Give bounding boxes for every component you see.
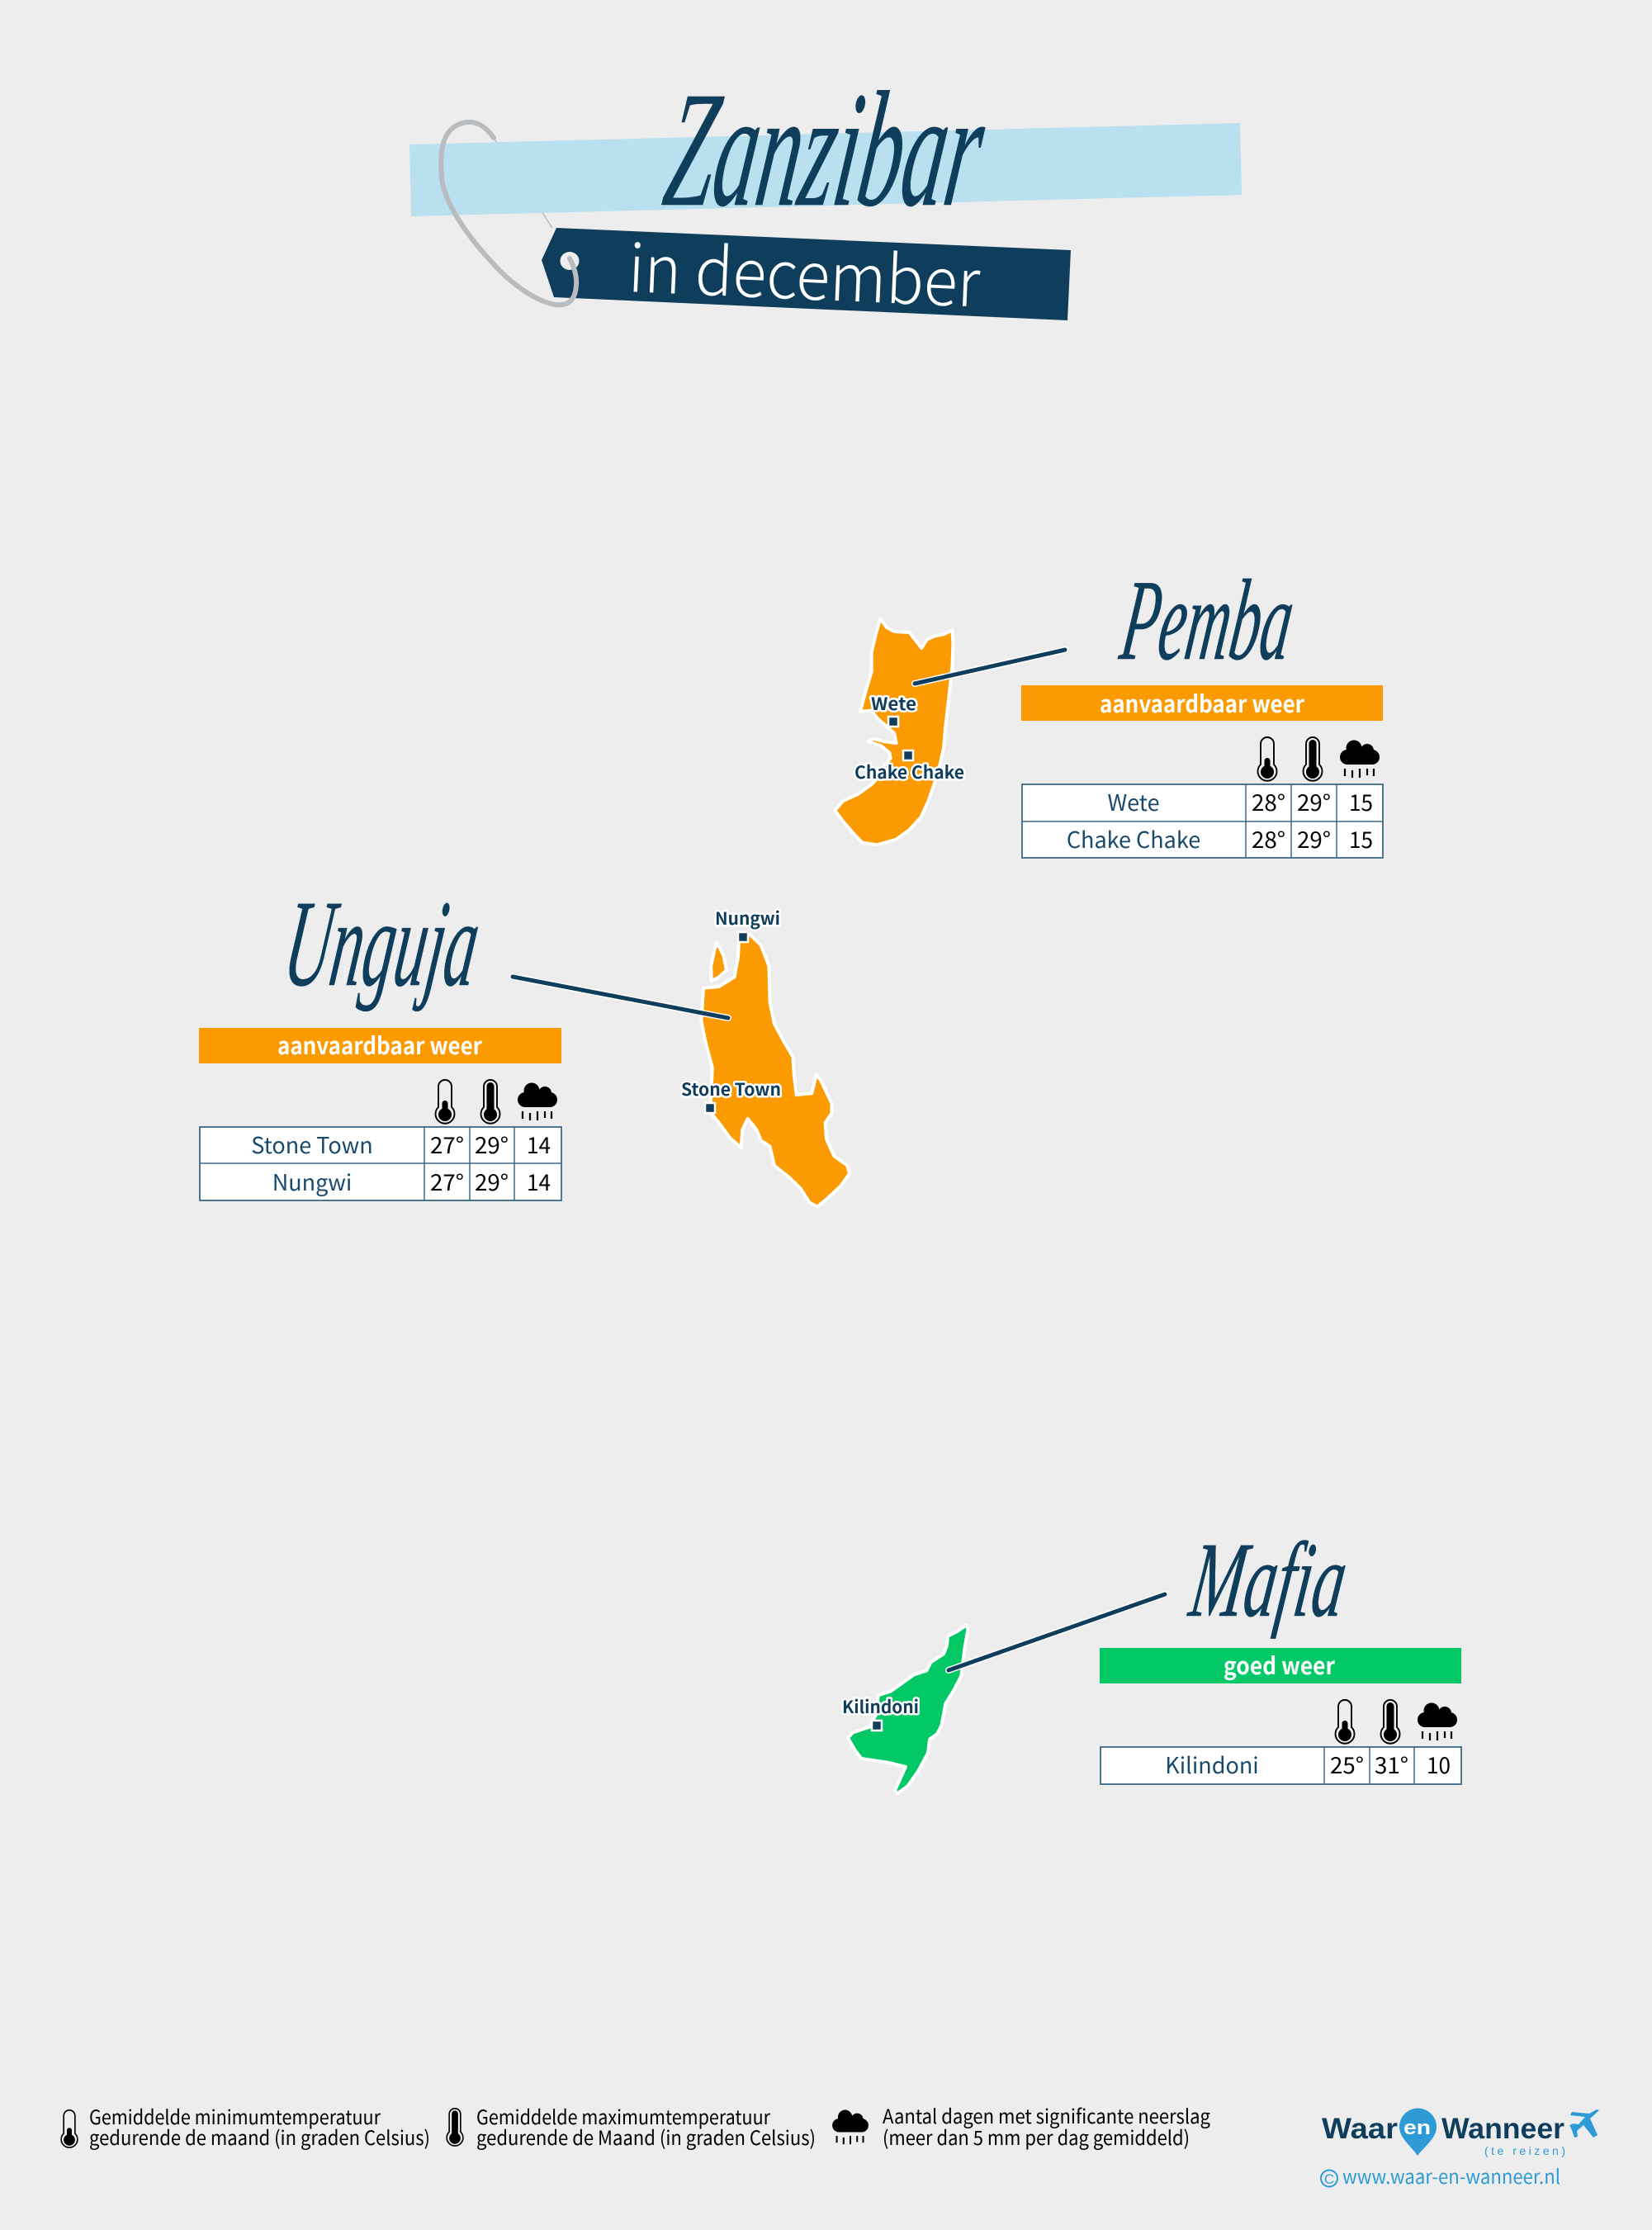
map label: Nungwi: Nungwi (715, 906, 780, 930)
table: Unguja: 27° (430, 1165, 464, 1197)
leader line: Mafia (949, 1594, 1165, 1670)
marker: Stone Town (705, 1103, 715, 1113)
map: Pemba island (835, 618, 953, 845)
title: Zanzibar: Zanzibar (656, 59, 995, 241)
table: Unguja: 14 (527, 1165, 551, 1197)
weather banner (199, 1027, 561, 1063)
weather banner: aanvaardbaar weer (1100, 685, 1304, 720)
table: Unguja: 14 (527, 1128, 551, 1160)
title band (409, 123, 1242, 216)
heading: Mafia: Mafia (1183, 1522, 1354, 1640)
table: Pemba: 15 (1349, 822, 1373, 855)
icon: minimum temperature (1258, 737, 1276, 781)
subtitle: in december: in december (627, 215, 982, 327)
table: Pemba: 29° (1297, 785, 1331, 817)
heading: Pemba: Pemba (1114, 557, 1301, 684)
table: Pemba: 15 (1349, 785, 1373, 817)
table: Mafia: 31° (1375, 1748, 1408, 1780)
panel: Mafia (842, 1522, 1461, 1794)
icon: rain (518, 1083, 557, 1120)
table: Mafia: 25° (1330, 1748, 1364, 1780)
table: Mafia: 10 (1427, 1748, 1451, 1780)
table: Pemba: Wete (1107, 785, 1160, 817)
table: Mafia: Kilindoni (1165, 1748, 1259, 1780)
logo: Waar en Wanneer: (te reizen) (1484, 2144, 1565, 2157)
marker: Nungwi (738, 932, 748, 942)
logo: Waar en Wanneer (1321, 2109, 1599, 2190)
icon: minimum temperature (436, 1080, 454, 1124)
table: Pemba: 28° (1252, 785, 1285, 817)
icon: airplane (1569, 2109, 1599, 2138)
icon: maximum temperature (1303, 737, 1323, 781)
table: Unguja (200, 1127, 561, 1200)
weather banner (1021, 685, 1383, 721)
leader line: Unguja (513, 977, 728, 1018)
icon: map pin: en (1403, 2117, 1431, 2139)
logo: Waar en Wanneer: Waar (1322, 2113, 1398, 2145)
legend: maximum temperature: gedurende de Maand (in graden Celsius) (476, 2122, 816, 2151)
marker: Wete (888, 717, 898, 727)
legend: minimum temperature (61, 2101, 430, 2151)
legend: minimum temperature: gedurende de maand (in graden Celsius) (89, 2122, 430, 2151)
weather banner: goed weer (1224, 1647, 1335, 1682)
table: Unguja: 27° (430, 1128, 464, 1160)
table: Pemba: 29° (1297, 822, 1331, 855)
table: Pemba (1022, 784, 1383, 858)
icon: maximum temperature (1380, 1700, 1400, 1744)
icon: map pin (1399, 2109, 1437, 2156)
table: Unguja: Stone Town (251, 1128, 373, 1160)
title block (409, 59, 1242, 327)
table: Unguja: Nungwi (272, 1165, 352, 1197)
weather banner (1100, 1647, 1461, 1683)
table: Pemba: Chake Chake (1067, 822, 1200, 855)
legend: maximum temperature: Gemiddelde maximumtemperatuur (476, 2101, 771, 2130)
map label: Wete: Wete (871, 691, 916, 716)
leader line: Pemba (915, 650, 1065, 684)
panel: Unguja (199, 875, 850, 1207)
legend (61, 2100, 1210, 2151)
legend: rain days (832, 2100, 1210, 2151)
panel: Pemba (835, 557, 1383, 858)
table: Pemba: 28° (1252, 822, 1285, 855)
marker: Chake Chake (903, 750, 913, 760)
map: Unguja island (701, 935, 850, 1207)
table: Unguja: 29° (475, 1128, 509, 1160)
icon: rain (1340, 740, 1380, 778)
legend: maximum temperature (447, 2101, 816, 2151)
weather banner: aanvaardbaar weer (277, 1027, 482, 1062)
map label: Chake Chake: Chake Chake (854, 760, 964, 784)
copyright URL: www.waar-en-wanneer.nl (1342, 2161, 1560, 2190)
tag string (441, 122, 576, 305)
map label: Stone Town: Stone Town (681, 1077, 781, 1101)
legend: rain days: (meer dan 5 mm per dag gemiddeld) (883, 2122, 1190, 2151)
map: Mafia island (848, 1625, 968, 1794)
icon: rain (1418, 1702, 1457, 1740)
map label: Kilindoni: Kilindoni (842, 1694, 919, 1719)
icon: minimum temperature (1336, 1700, 1354, 1744)
copyright URL: C (1324, 2171, 1334, 2187)
legend: minimum temperature: Gemiddelde minimumtemperatuur (89, 2101, 381, 2130)
legend: rain days: Aantal dagen met significante neerslag (883, 2100, 1210, 2129)
table: Unguja: 29° (475, 1165, 509, 1197)
marker: Kilindoni (872, 1721, 882, 1730)
logo: Waar en Wanneer: Wanneer (1441, 2113, 1564, 2145)
icon: maximum temperature (480, 1080, 500, 1124)
price tag (542, 228, 1071, 320)
heading: Unguja: Unguja (277, 875, 488, 1012)
table: Mafia (1101, 1747, 1461, 1784)
